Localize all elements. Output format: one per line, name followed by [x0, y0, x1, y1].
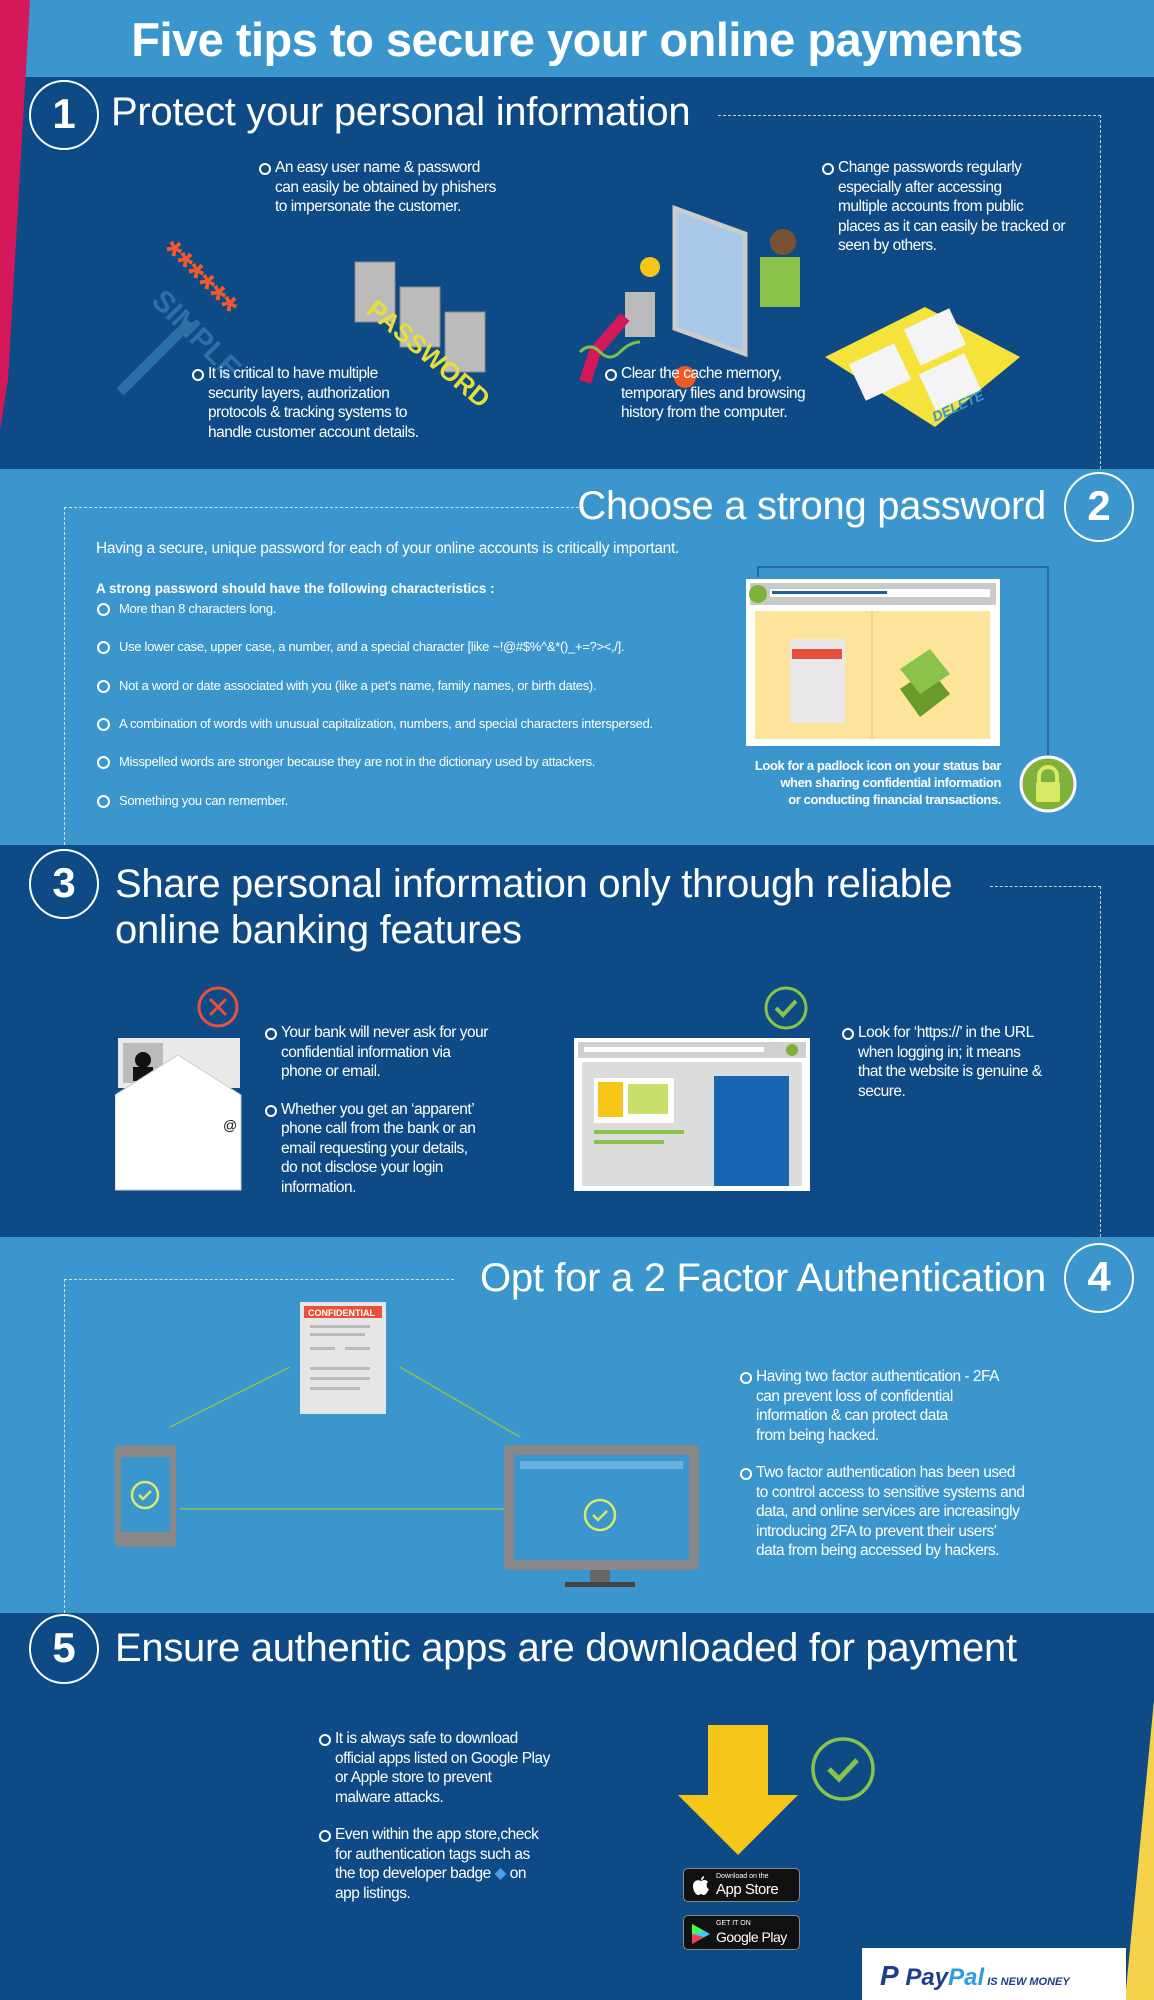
- number 2: 2: [1087, 482, 1111, 529]
- text: bullet change passwords: places as it can easily be tracked or: [838, 218, 1065, 234]
- text: bullet security layers: [192, 365, 419, 440]
- text: bullet clear cache: [605, 365, 805, 421]
- text: bullet change passwords: [822, 159, 1066, 254]
- text: bullet clear cache: temporary files and browsing: [621, 384, 805, 402]
- icon: red X: [198, 986, 238, 1028]
- text: 2FA bullets: Having two factor authentication - 2FA: [756, 1368, 999, 1385]
- badge: app store: [683, 1868, 800, 1902]
- text: https: secure.: [858, 1082, 905, 1100]
- icon: asterisks simple: ******: [149, 232, 246, 330]
- text: characteristics list: A strong password should have the following characteristics :: [96, 581, 495, 596]
- text: bullet security layers: handle customer account details.: [208, 424, 419, 440]
- text: app bullets: [319, 1730, 550, 1902]
- heading 1: Protect your personal information: [111, 90, 690, 134]
- icon: download arrow: [678, 1725, 798, 1855]
- background bands: [0, 0, 1154, 77]
- text: app bullets: malware attacks.: [335, 1788, 443, 1806]
- text: characteristics list: More than 8 characters long.: [119, 601, 276, 616]
- heading 5: Ensure authentic apps are downloaded for payment: [115, 1626, 1017, 1670]
- panel: section 4: [64, 1243, 1134, 1613]
- text: 2FA bullets: introducing 2FA to prevent their users': [756, 1522, 996, 1540]
- text: https: Look for ‘https://’ in the URL: [858, 1024, 1034, 1041]
- text: bank never asks: information.: [281, 1178, 356, 1196]
- diagram: 2FA devices: [115, 1302, 699, 1587]
- logo: paypal: [862, 1948, 1126, 2000]
- text: bank never asks: do not disclose your login: [281, 1159, 443, 1176]
- number 5: 5: [52, 1624, 76, 1671]
- panel: section 1: [29, 80, 1101, 469]
- badge: app store: App Store: [716, 1881, 778, 1898]
- text: bullet clear cache: history from the computer.: [621, 404, 787, 421]
- text: bullet security layers: security layers, authorization: [208, 384, 389, 402]
- text: bank never asks: confidential information via: [281, 1044, 451, 1060]
- text: app bullets: or Apple store to prevent: [335, 1769, 491, 1786]
- heading 3: Share personal information only through reliable: [115, 862, 952, 906]
- text: bullet easy password: to impersonate the customer.: [275, 198, 461, 215]
- text: bank never asks: Your bank will never ask for your: [281, 1024, 488, 1041]
- text: padlock caption: when sharing confidential information: [780, 775, 1001, 790]
- text: bank never asks: email requesting your details,: [281, 1140, 468, 1156]
- heading 3: [115, 862, 952, 952]
- text: app bullets: Even within the app store,check: [335, 1826, 538, 1843]
- text: app bullets: for authentication tags such as: [335, 1846, 530, 1862]
- text: bank never asks: phone call from the bank or an: [281, 1120, 475, 1137]
- text: padlock caption: or conducting financial transactions.: [788, 792, 1001, 807]
- number 3: [29, 849, 99, 919]
- text: characteristics list: Use lower case, upper case, a number, and a special character [like ~!@#$%^&*()_+=?><,/].: [119, 639, 624, 654]
- icon: green check: [764, 986, 808, 1030]
- number 5: [29, 1614, 99, 1684]
- text: characteristics list: Something you can remember.: [119, 793, 288, 808]
- icon: password blocks: PASSWORD: [361, 294, 496, 414]
- diagram: 2FA devices: CONFIDENTIAL: [308, 1308, 375, 1318]
- heading 4: Opt for a 2 Factor Authentication: [480, 1256, 1046, 1300]
- text: 2FA bullets: information & can protect data: [756, 1407, 948, 1424]
- text: bank never asks: phone or email.: [281, 1063, 380, 1080]
- number 1: [29, 80, 99, 150]
- text: app bullets: the top developer badge ◆ on: [335, 1865, 526, 1882]
- text: intro: Having a secure, unique password for each of your online accounts is critically important.: [96, 540, 679, 557]
- badge: google play: GET IT ON: [716, 1920, 751, 1927]
- number 4: [1064, 1243, 1134, 1313]
- text: https: [842, 1024, 1042, 1100]
- text: characteristics list: A combination of words with unusual capitalization, numbers, and special characters interspersed.: [119, 716, 653, 731]
- icon: padlock circle: [1020, 756, 1076, 812]
- text: 2FA bullets: can prevent loss of confidential: [756, 1388, 953, 1404]
- panel: section 3: [29, 849, 1101, 1237]
- heading 3: online banking features: [115, 908, 522, 952]
- text: 2FA bullets: [740, 1368, 1024, 1559]
- text: bullet easy password: can easily be obtained by phishers: [275, 178, 496, 196]
- text: bullet clear cache: Clear the cache memory,: [621, 365, 782, 382]
- text: padlock caption: [755, 758, 1002, 807]
- text: bullet easy password: [259, 159, 496, 215]
- number 1: 1: [52, 90, 76, 137]
- title: Five tips to secure your online payments: [131, 13, 1023, 66]
- text: app bullets: It is always safe to download: [335, 1730, 518, 1747]
- text: characteristics list: Misspelled words are stronger because they are not in the dictionary used by attackers.: [119, 754, 595, 769]
- text: app bullets: app listings.: [335, 1884, 410, 1902]
- icon: envelope: [115, 1038, 242, 1190]
- icon: envelope: @: [223, 1117, 237, 1133]
- icon: phisher computer: [579, 205, 800, 388]
- text: https: when logging in; it means: [858, 1044, 1020, 1060]
- icon: delete tray: DELETE: [930, 387, 987, 425]
- text: 2FA bullets: Two factor authentication has been used: [756, 1464, 1015, 1481]
- badge: google play: Google Play: [716, 1929, 787, 1945]
- text: characteristics list: Not a word or date associated with you (like a pet's name, family names, or birth dates).: [119, 678, 596, 693]
- text: 2FA bullets: data, and online services are increasingly: [756, 1503, 1019, 1520]
- heading 2: Choose a strong password: [577, 484, 1046, 528]
- icon: secure browser: [574, 1038, 810, 1191]
- number 2: [1064, 472, 1134, 542]
- text: bank never asks: Whether you get an ‘apparent’: [281, 1100, 474, 1118]
- text: bullet change passwords: seen by others.: [838, 237, 936, 254]
- text: padlock caption: Look for a padlock icon on your status bar: [755, 758, 1001, 773]
- text: bullet change passwords: multiple accounts from public: [838, 198, 1023, 215]
- number 4: 4: [1087, 1253, 1111, 1300]
- badge: google play: [683, 1915, 800, 1950]
- text: bullet change passwords: especially after accessing: [838, 178, 1002, 196]
- text: bullet security layers: It is critical to have multiple: [208, 365, 378, 382]
- text: bullet easy password: An easy user name & password: [275, 159, 480, 176]
- badge: app store: Download on the: [716, 1873, 769, 1880]
- icon: check circle: [811, 1737, 875, 1801]
- number 3: 3: [52, 859, 76, 906]
- text: bank never asks: [265, 1024, 488, 1196]
- icon: asterisks simple: [116, 232, 247, 396]
- text: 2FA bullets: from being hacked.: [756, 1426, 879, 1444]
- text: bullet security layers: protocols & tracking systems to: [208, 404, 407, 421]
- icon: asterisks simple: SIMPLE: [145, 284, 247, 386]
- icon: browser with padlock: [746, 566, 1049, 756]
- text: app bullets: official apps listed on Google Play: [335, 1750, 550, 1766]
- text: https: that the website is genuine &: [858, 1063, 1042, 1080]
- panel: section 2: [64, 472, 1134, 845]
- logo: paypal: P PayPal IS NEW MONEY: [880, 1960, 1070, 1991]
- text: bullet change passwords: Change passwords regularly: [838, 159, 1021, 176]
- text: 2FA bullets: data from being accessed by hackers.: [756, 1542, 999, 1559]
- icon: delete tray: [825, 307, 1020, 427]
- panel: section 5: [29, 1614, 1126, 2000]
- text: 2FA bullets: to control access to sensitive systems and: [756, 1484, 1024, 1500]
- text: characteristics list: [96, 581, 653, 808]
